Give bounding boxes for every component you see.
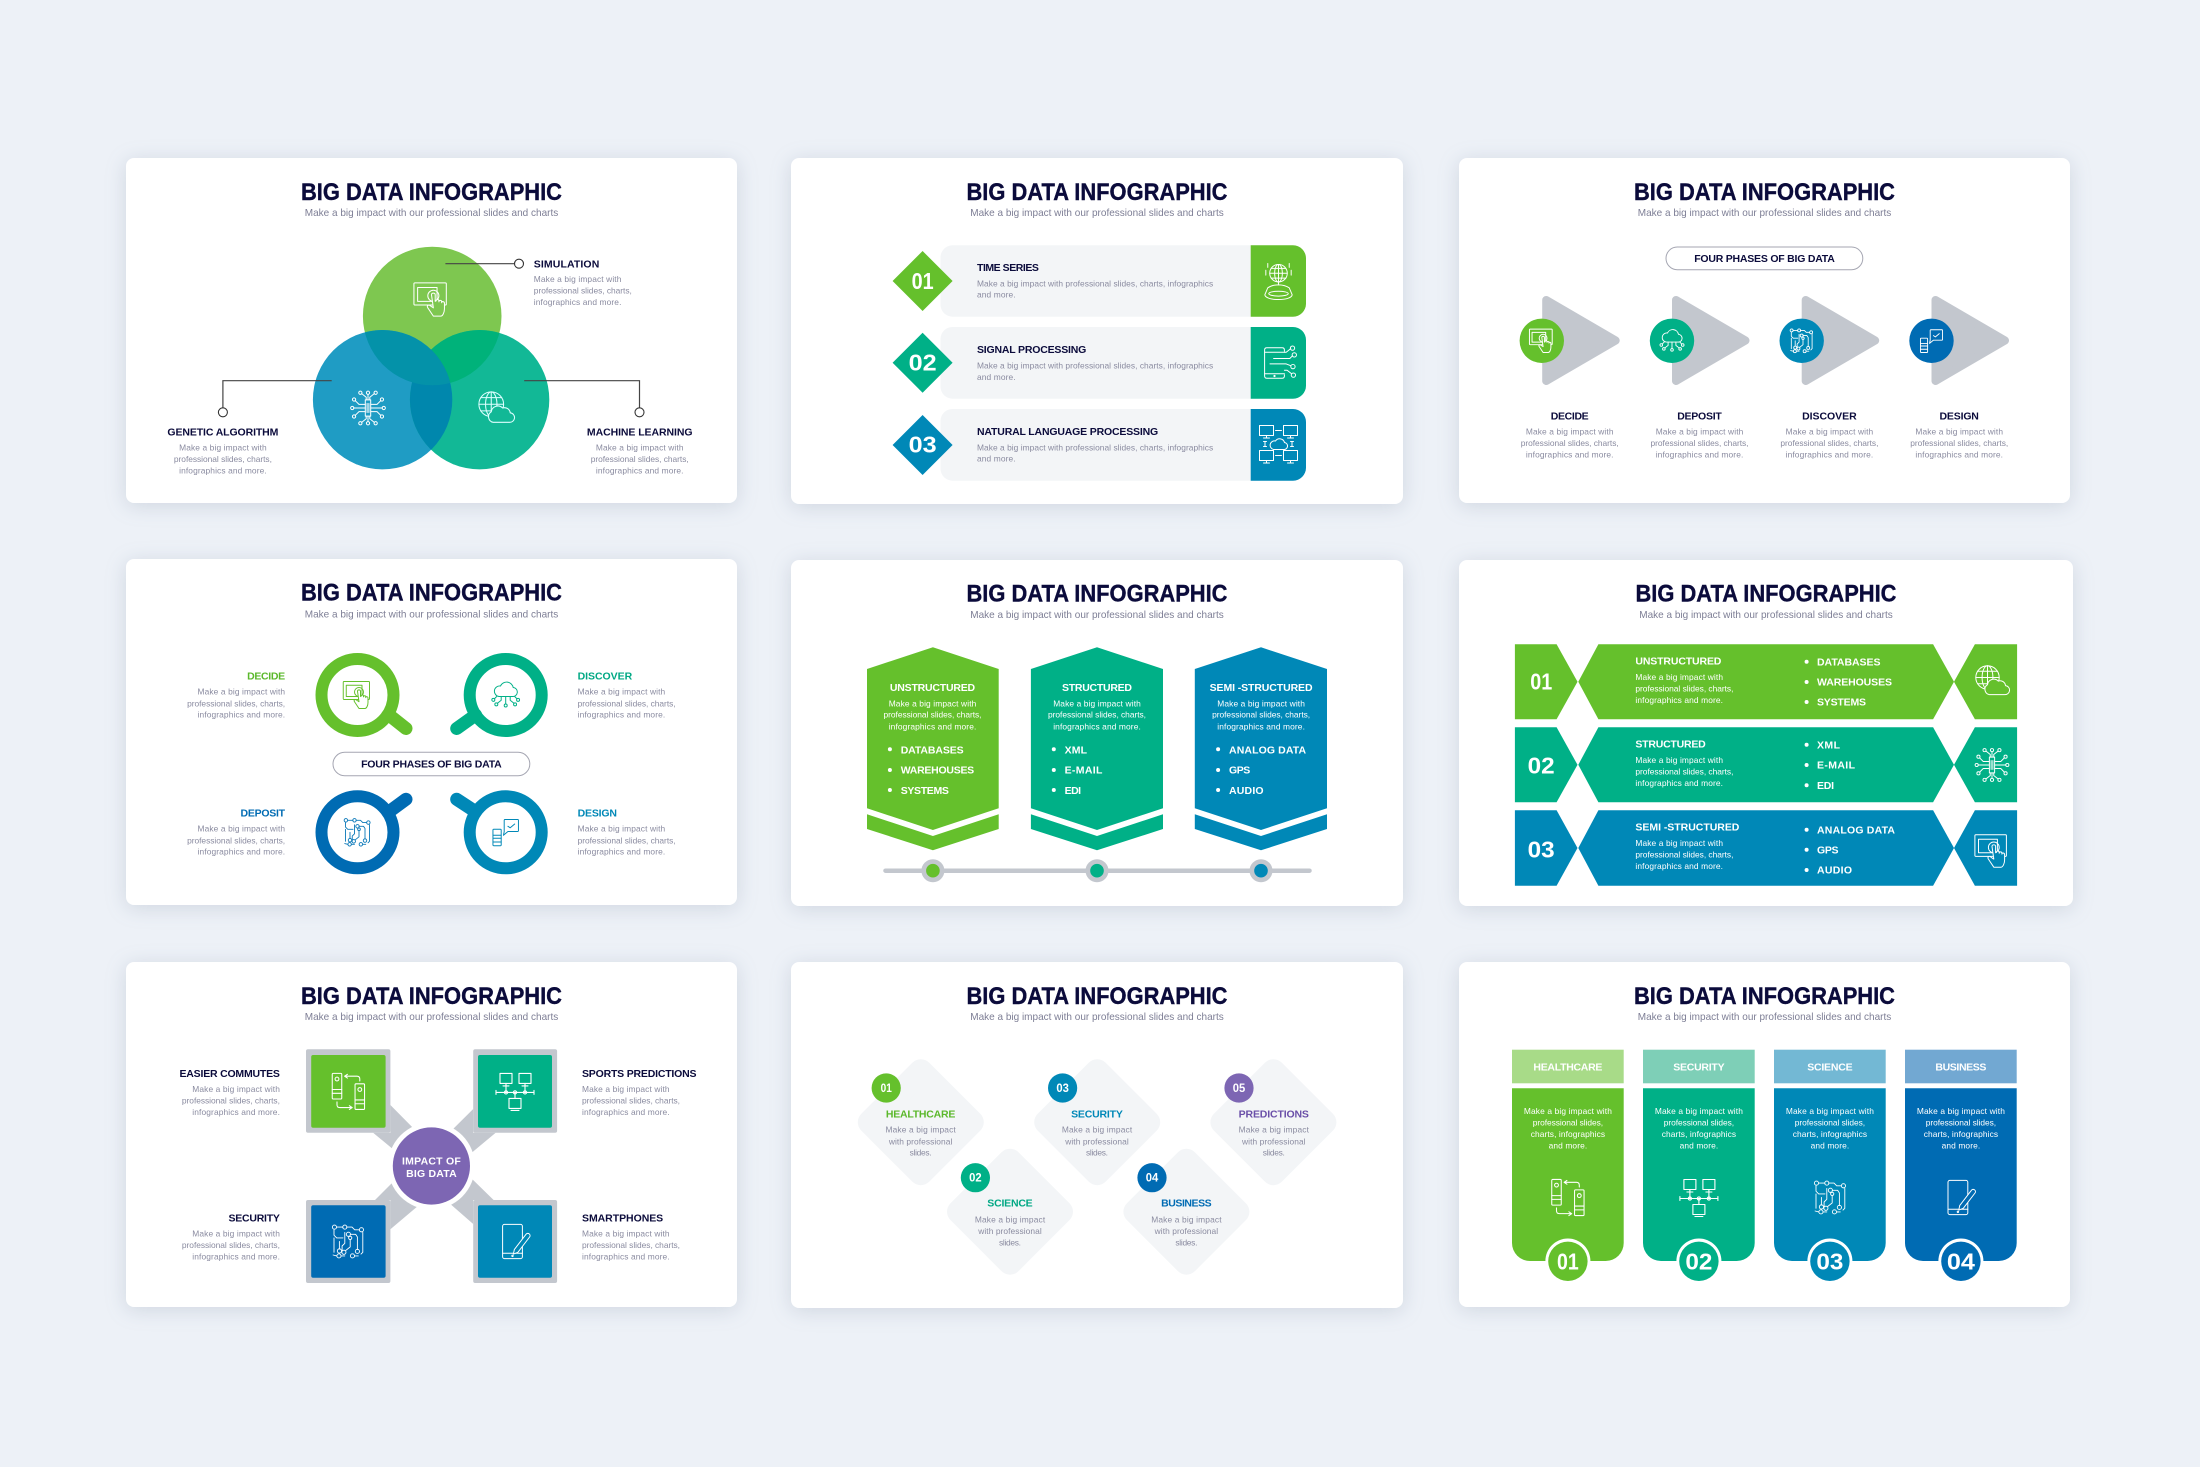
magnifier: deposit	[322, 796, 406, 868]
text: smartphones: Make a big impact with	[582, 1228, 670, 1238]
text: decide: professional slides, charts,	[187, 698, 285, 708]
column: unstructured: UNSTRUCTURED	[890, 682, 976, 694]
panel: venn diagram	[126, 158, 737, 503]
text: security: professional slides, charts,	[182, 1240, 280, 1250]
column: structured: professional slides, charts,	[1048, 710, 1146, 720]
diamond 02: science: with professional	[977, 1226, 1042, 1236]
diamond 04: business	[1135, 1161, 1237, 1263]
text: discover: DISCOVER	[578, 670, 633, 682]
text: easier commutes: infographics and more.	[192, 1107, 280, 1117]
text: design: Make a big impact with	[578, 824, 666, 834]
step: deposit: Make a big impact with	[1656, 426, 1744, 436]
text: easier commutes: EASIER COMMUTES	[180, 1068, 280, 1080]
column: semi-structured	[1195, 647, 1327, 850]
diamond 02: science: Make a big impact	[975, 1214, 1046, 1224]
icon: servers swap	[332, 1073, 365, 1109]
text: smartphones: infographics and more.	[582, 1251, 670, 1261]
diamond 02: science	[959, 1161, 1061, 1263]
pill heading: FOUR PHASES OF BIG DATA	[361, 759, 502, 771]
column 02: security: SECURITY	[1673, 1062, 1725, 1074]
text: sports predictions	[582, 1068, 696, 1117]
column 02: security: professional slides,	[1664, 1117, 1734, 1127]
column 02: security: 02	[1685, 1249, 1712, 1275]
text: deposit: Make a big impact with	[198, 824, 285, 834]
icon: network	[496, 1073, 534, 1110]
row 01: time series: 01	[912, 268, 934, 294]
diamond 03: security: Make a big impact	[1062, 1125, 1133, 1135]
column 02: security: charts, infographics	[1662, 1129, 1736, 1139]
icon: server and chat	[493, 820, 518, 846]
row 03: natural language processing: 03	[909, 432, 937, 458]
magnifier: design	[457, 796, 542, 868]
text: genetic algorithm	[167, 426, 279, 475]
bar 01: UNSTRUCTURED	[1635, 656, 1722, 668]
diamond 04: business: 04	[1146, 1173, 1159, 1185]
text: smartphones	[582, 1212, 680, 1261]
icon: chip	[351, 391, 385, 425]
text: genetic algorithm: Make a big impact with	[179, 442, 267, 452]
icon: cloud nodes	[1660, 330, 1684, 351]
text: genetic algorithm: infographics and more.	[179, 465, 267, 475]
row 01: time series: and more.	[977, 290, 1016, 300]
text: decide: DECIDE	[247, 670, 285, 682]
text: sports predictions: SPORTS PREDICTIONS	[582, 1068, 696, 1080]
text: machine learning: professional slides, charts,	[591, 454, 689, 464]
icon: servers swap	[1552, 1179, 1584, 1216]
column 03: science: charts, infographics	[1793, 1129, 1867, 1139]
bar 02	[1515, 727, 2017, 802]
column: structured: STRUCTURED	[1062, 682, 1132, 694]
diamond 05: predictions: 05	[1233, 1083, 1246, 1095]
column 01: healthcare: HEALTHCARE	[1533, 1062, 1602, 1074]
step: design: Make a big impact with	[1915, 426, 2003, 436]
column 04: business	[1905, 1050, 2017, 1284]
column 04: business: charts, infographics	[1924, 1129, 1998, 1139]
connector: genetic algorithm	[218, 381, 332, 417]
text: security	[182, 1212, 280, 1261]
step: design	[1909, 300, 2008, 459]
text: deposit	[187, 808, 286, 857]
row 02: signal processing: Make a big impact with professional slides, charts, infographics	[977, 360, 1213, 370]
column: unstructured: infographics and more.	[889, 721, 976, 731]
diamond 01: healthcare: slides.	[910, 1148, 932, 1158]
bar 03: infographics and more.	[1635, 861, 1723, 871]
text: deposit: professional slides, charts,	[187, 835, 285, 845]
step: discover: Make a big impact with	[1786, 426, 1874, 436]
diamond 01: healthcare: with professional	[888, 1136, 952, 1146]
subtitle: Make a big impact with our professional slides and charts	[1638, 207, 1891, 219]
text: decide: Make a big impact with	[198, 687, 285, 697]
text: design: professional slides, charts,	[578, 835, 676, 845]
step: discover	[1780, 300, 1878, 459]
step: decide: Make a big impact with	[1526, 426, 1614, 436]
diamond 02: science: SCIENCE	[987, 1198, 1033, 1210]
title: BIG DATA INFOGRAPHIC	[1634, 983, 1895, 1010]
text: design	[578, 808, 676, 857]
row 01: time series	[893, 245, 1306, 317]
text: simulation: professional slides, charts,	[534, 286, 632, 296]
row 03: natural language processing	[893, 409, 1306, 481]
bar 03: GPS	[1817, 844, 1838, 856]
panel: diamonds	[791, 962, 1403, 1308]
title: BIG DATA INFOGRAPHIC	[301, 983, 562, 1010]
icon: circuit	[344, 819, 370, 846]
text: smartphones: SMARTPHONES	[582, 1212, 663, 1224]
icon: globe and cloud	[479, 392, 515, 422]
step: decide: DECIDE	[1551, 410, 1589, 422]
text: simulation: SIMULATION	[534, 258, 599, 270]
column 01: healthcare	[1512, 1050, 1624, 1284]
row 01: time series: Make a big impact with professional slides, charts, infographics	[977, 278, 1213, 288]
diamond 03: security: slides.	[1086, 1148, 1108, 1158]
icon: globe hologram	[1265, 263, 1292, 300]
diamond 05: predictions	[1222, 1071, 1324, 1173]
pill heading	[1666, 247, 1863, 270]
panel: impact of big data hub	[126, 962, 737, 1307]
bar 01: professional slides, charts,	[1635, 684, 1733, 694]
step: deposit: DEPOSIT	[1677, 410, 1722, 422]
column: structured: EDI	[1065, 785, 1081, 797]
square: smartphones	[473, 1200, 557, 1283]
icon: touch screen	[1975, 835, 2006, 867]
row 02: signal processing: 02	[909, 350, 937, 376]
diamond 01: healthcare: 01	[881, 1083, 892, 1095]
text: discover: Make a big impact with	[578, 687, 666, 697]
diamond 04: business: slides.	[1175, 1237, 1197, 1247]
text: design: DESIGN	[578, 808, 617, 820]
subtitle: Make a big impact with our professional slides and charts	[305, 608, 558, 620]
step: discover: professional slides, charts,	[1780, 438, 1878, 448]
title: BIG DATA INFOGRAPHIC	[1636, 580, 1896, 608]
column 02: security	[1643, 1050, 1755, 1284]
column: structured: E-MAIL	[1065, 765, 1103, 777]
title: BIG DATA INFOGRAPHIC	[966, 580, 1228, 608]
bar 02: Make a big impact with	[1635, 755, 1723, 765]
subtitle: Make a big impact with our professional slides and charts	[305, 1011, 558, 1023]
column 03: science: Make a big impact with	[1786, 1106, 1874, 1116]
square: sports predictions	[473, 1049, 557, 1133]
magnifier: decide	[322, 659, 406, 731]
column 04: business: and more.	[1942, 1140, 1980, 1150]
diamond 04: business: BUSINESS	[1161, 1198, 1212, 1210]
bar 01: infographics and more.	[1635, 695, 1723, 705]
column: semi-structured: Make a big impact with	[1217, 698, 1305, 708]
title: BIG DATA INFOGRAPHIC	[966, 179, 1228, 206]
icon: tablet and pen	[1948, 1180, 1975, 1215]
title: BIG DATA INFOGRAPHIC	[301, 179, 562, 206]
bar 01: WAREHOUSES	[1817, 676, 1892, 688]
column: unstructured: professional slides, charts,	[884, 710, 982, 720]
diamond 03: security: with professional	[1064, 1136, 1129, 1146]
step: design: professional slides, charts,	[1910, 438, 2008, 448]
column: unstructured	[867, 647, 999, 850]
panel: four phases triangles	[1459, 158, 2070, 503]
diamond 02: science: slides.	[999, 1237, 1021, 1247]
column 03: science: SCIENCE	[1807, 1062, 1853, 1074]
column 03: science: professional slides,	[1795, 1117, 1865, 1127]
diamond 01: healthcare	[870, 1071, 972, 1173]
bar 02: EDI	[1817, 780, 1834, 792]
column 01: healthcare: Make a big impact with	[1524, 1106, 1612, 1116]
diamond 01: healthcare: Make a big impact	[885, 1125, 956, 1135]
icon: touch screen	[1529, 329, 1552, 352]
text: decide	[187, 670, 285, 720]
step: design: infographics and more.	[1915, 449, 2003, 459]
square: easier commutes	[306, 1049, 390, 1133]
column 01: healthcare: charts, infographics	[1531, 1129, 1605, 1139]
column: semi-structured: GPS	[1229, 765, 1250, 777]
title: BIG DATA INFOGRAPHIC	[1634, 179, 1895, 206]
subtitle: Make a big impact with our professional slides and charts	[1638, 1011, 1891, 1023]
text: discover: professional slides, charts,	[578, 698, 676, 708]
text: decide: infographics and more.	[198, 710, 285, 720]
diamond 05: predictions: PREDICTIONS	[1239, 1108, 1309, 1120]
text: genetic algorithm: GENETIC ALGORITHM	[167, 426, 279, 438]
column: semi-structured: AUDIO	[1229, 785, 1264, 797]
column 02: security: Make a big impact with	[1655, 1106, 1743, 1116]
column: unstructured: Make a big impact with	[889, 698, 977, 708]
row 02: signal processing: SIGNAL PROCESSING	[977, 344, 1086, 356]
icon: touch screen	[343, 682, 370, 708]
icon: globe and cloud	[1976, 666, 2010, 695]
diamond 01: healthcare: HEALTHCARE	[886, 1108, 955, 1120]
step: discover: DISCOVER	[1802, 410, 1857, 422]
text: machine learning: MACHINE LEARNING	[587, 426, 692, 438]
text: security: infographics and more.	[192, 1251, 280, 1261]
bar 03: AUDIO	[1817, 865, 1852, 877]
text: genetic algorithm: professional slides, charts,	[174, 454, 272, 464]
subtitle: Make a big impact with our professional slides and charts	[1639, 609, 1893, 621]
step: deposit: professional slides, charts,	[1650, 438, 1748, 448]
diamond 05: predictions: with professional	[1241, 1136, 1306, 1146]
text: security: SECURITY	[228, 1212, 280, 1224]
magnifier: discover	[457, 659, 542, 731]
text: sports predictions: professional slides, charts,	[582, 1096, 680, 1106]
title: BIG DATA INFOGRAPHIC	[301, 580, 562, 607]
icon: touch screen	[414, 283, 446, 316]
column: unstructured: DATABASES	[901, 744, 964, 756]
column: semi-structured: ANALOG DATA	[1229, 744, 1307, 756]
icon: cloud nodes	[492, 682, 520, 707]
icon: server and chat	[1920, 330, 1943, 352]
text: easier commutes	[180, 1068, 280, 1117]
column 04: business: BUSINESS	[1935, 1062, 1986, 1074]
step: decide: infographics and more.	[1526, 449, 1613, 459]
row 01: time series: TIME SERIES	[977, 262, 1039, 274]
row 02: signal processing	[893, 327, 1306, 399]
subtitle: Make a big impact with our professional slides and charts	[305, 207, 558, 219]
column 02: security: and more.	[1680, 1140, 1718, 1150]
hub circle	[388, 1122, 475, 1210]
step: deposit	[1650, 300, 1748, 459]
text: machine learning: infographics and more.	[596, 465, 684, 475]
bar 01	[1515, 644, 2017, 719]
step: decide	[1520, 300, 1619, 459]
connector: simulation	[445, 259, 524, 268]
step: design: DESIGN	[1940, 410, 1979, 422]
column: semi-structured: professional slides, charts,	[1212, 710, 1310, 720]
text: sports predictions: Make a big impact with	[582, 1084, 670, 1094]
row 03: natural language processing: Make a big impact with professional slides, charts, infographics	[977, 442, 1213, 452]
panel: magnifiers	[126, 559, 737, 905]
icon: tablet and pen	[503, 1224, 530, 1259]
panel: four columns	[1459, 962, 2070, 1307]
text: smartphones: professional slides, charts,	[582, 1240, 680, 1250]
bar 03: SEMI -STRUCTURED	[1635, 822, 1740, 834]
subtitle: Make a big impact with our professional slides and charts	[970, 207, 1224, 219]
column 03: science	[1774, 1050, 1886, 1284]
bar 02: STRUCTURED	[1635, 739, 1706, 751]
diamond 02: science: 02	[969, 1173, 982, 1185]
column: semi-structured: SEMI -STRUCTURED	[1210, 682, 1313, 694]
column: structured	[1031, 647, 1163, 850]
column 01: healthcare: 01	[1557, 1249, 1579, 1275]
venn circles	[313, 247, 549, 469]
diamond 03: security	[1046, 1071, 1148, 1173]
text: discover	[578, 670, 676, 720]
connector: machine learning	[524, 381, 644, 417]
icon: circuit	[1790, 329, 1813, 353]
text: design: infographics and more.	[578, 847, 665, 857]
bar 01: DATABASES	[1817, 656, 1880, 668]
column 04: business: professional slides,	[1926, 1117, 1996, 1127]
diamond 04: business: with professional	[1154, 1226, 1218, 1236]
column: unstructured: WAREHOUSES	[901, 765, 974, 777]
icon: network with cloud	[1260, 426, 1298, 463]
icon: network	[1680, 1180, 1718, 1216]
hub connectors	[373, 1105, 496, 1229]
diamond 03: security: SECURITY	[1071, 1108, 1123, 1120]
column: structured: Make a big impact with	[1053, 698, 1141, 708]
column 01: healthcare: and more.	[1549, 1140, 1587, 1150]
text: deposit: DEPOSIT	[240, 808, 286, 820]
bar 02: E-MAIL	[1817, 760, 1856, 772]
bar 02: 02	[1528, 752, 1555, 778]
panel: hexagon columns	[791, 560, 1403, 906]
column: structured: infographics and more.	[1053, 721, 1141, 731]
step: decide: professional slides, charts,	[1521, 438, 1619, 448]
text: machine learning	[587, 426, 692, 475]
text: simulation: infographics and more.	[534, 297, 621, 307]
panel: arrow bars	[1459, 560, 2073, 906]
icon: phone circuit	[1265, 346, 1296, 378]
column 04: business: 04	[1947, 1249, 1975, 1275]
bar 01: SYSTEMS	[1817, 697, 1866, 709]
text: discover: infographics and more.	[578, 710, 665, 720]
text: machine learning: Make a big impact with	[596, 442, 684, 452]
text: sports predictions: infographics and more.	[582, 1107, 670, 1117]
column: structured: XML	[1065, 744, 1088, 756]
subtitle: Make a big impact with our professional slides and charts	[970, 609, 1224, 621]
column: semi-structured: infographics and more.	[1217, 721, 1305, 731]
column: unstructured: SYSTEMS	[901, 785, 949, 797]
row 03: natural language processing: NATURAL LANGUAGE PROCESSING	[977, 426, 1158, 438]
pill heading: FOUR PHASES OF BIG DATA	[1694, 253, 1835, 265]
icon: chip	[1975, 749, 2009, 781]
bar 01: 01	[1530, 669, 1552, 695]
bar 03: Make a big impact with	[1635, 838, 1723, 848]
square: security	[306, 1200, 390, 1283]
title: BIG DATA INFOGRAPHIC	[966, 983, 1228, 1010]
row 02: signal processing: and more.	[977, 372, 1016, 382]
column 03: science: and more.	[1811, 1140, 1849, 1150]
diamond 05: predictions: Make a big impact	[1239, 1125, 1310, 1135]
bar 02: infographics and more.	[1635, 778, 1723, 788]
bar 03: professional slides, charts,	[1635, 850, 1733, 860]
text: easier commutes: Make a big impact with	[192, 1084, 280, 1094]
step: deposit: infographics and more.	[1656, 449, 1743, 459]
diamond 03: security: 03	[1056, 1083, 1069, 1095]
subtitle: Make a big impact with our professional slides and charts	[970, 1011, 1224, 1023]
icon: circuit	[1814, 1181, 1846, 1214]
bar 02: professional slides, charts,	[1635, 767, 1733, 777]
timeline	[886, 859, 1310, 882]
text: deposit: infographics and more.	[198, 847, 285, 857]
hub circle: BIG DATA	[406, 1168, 457, 1180]
text: security: Make a big impact with	[192, 1228, 280, 1238]
bar 03: ANALOG DATA	[1817, 824, 1895, 836]
bar 03: 03	[1528, 836, 1555, 862]
diamond 05: predictions: slides.	[1263, 1148, 1285, 1158]
hub circle: IMPACT OF	[402, 1155, 461, 1167]
column 03: science: 03	[1816, 1249, 1843, 1275]
text: simulation	[534, 258, 632, 307]
bar 02: XML	[1817, 739, 1841, 751]
column 04: business: Make a big impact with	[1917, 1106, 2005, 1116]
bar 03	[1515, 810, 2017, 886]
row 03: natural language processing: and more.	[977, 454, 1016, 464]
pill heading	[333, 752, 530, 776]
text: easier commutes: professional slides, charts,	[182, 1096, 280, 1106]
diamond 04: business: Make a big impact	[1151, 1214, 1222, 1224]
panel: numbered list	[791, 158, 1403, 504]
icon: circuit	[332, 1225, 364, 1258]
step: discover: infographics and more.	[1786, 449, 1873, 459]
column 01: healthcare: professional slides,	[1533, 1117, 1603, 1127]
bar 01: Make a big impact with	[1635, 672, 1723, 682]
text: simulation: Make a big impact with	[534, 274, 622, 284]
